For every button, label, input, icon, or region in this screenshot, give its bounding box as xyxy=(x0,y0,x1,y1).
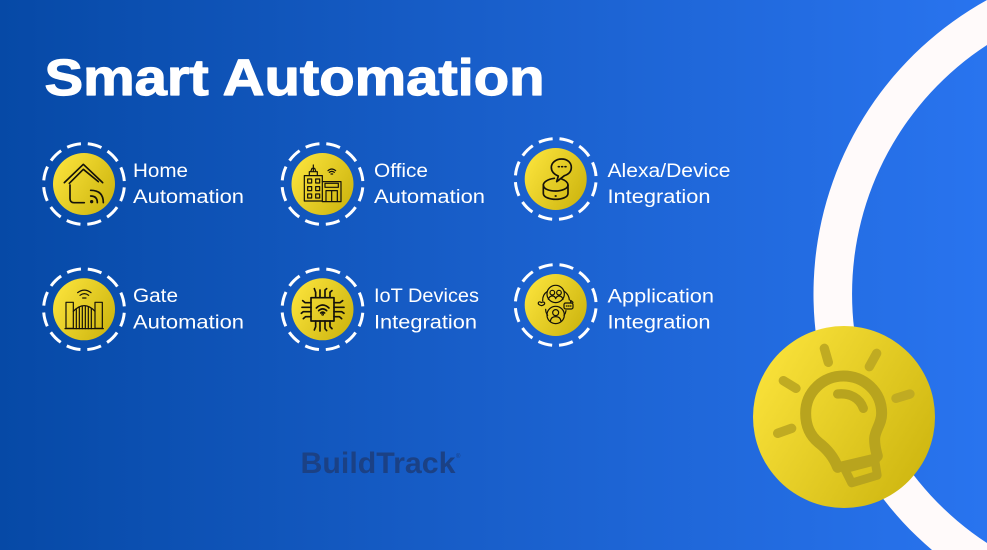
logo: BuildTrack: BuildTrack xyxy=(300,447,456,480)
label: iot devices integration: IoT Devices xyxy=(374,286,479,307)
label: alexa device integration: Alexa/Device xyxy=(608,161,730,182)
title: Smart Automation xyxy=(44,49,544,106)
item: office automation xyxy=(282,144,485,224)
logo: BuildTrack: ® xyxy=(456,453,461,460)
icon: chip xyxy=(282,269,363,350)
label: home automation: Automation xyxy=(133,187,244,208)
item: alexa device integration xyxy=(515,139,730,219)
item: iot devices integration xyxy=(282,269,479,350)
label: office automation: Office xyxy=(374,161,428,182)
icon: gate xyxy=(44,269,124,350)
label: iot devices integration: Integration xyxy=(374,312,477,334)
icon: connected users xyxy=(515,265,596,345)
label: iot devices integration xyxy=(374,286,479,334)
label: office automation: Automation xyxy=(374,187,485,208)
item: gate automation xyxy=(44,269,244,350)
icon: light bulb xyxy=(753,326,935,508)
label: alexa device integration xyxy=(608,161,730,208)
label: application integration: Application xyxy=(608,286,714,308)
label: home automation xyxy=(133,161,244,208)
label: application integration: Integration xyxy=(608,312,710,334)
decorative ring xyxy=(813,0,987,550)
label: home automation: Home xyxy=(133,161,188,182)
label: gate automation: Gate xyxy=(133,286,178,307)
label: gate automation: Automation xyxy=(133,312,244,334)
item: application integration xyxy=(515,265,714,345)
icon: home xyxy=(44,144,124,224)
label: application integration xyxy=(608,286,714,334)
label: alexa device integration: Integration xyxy=(608,187,710,208)
item: home automation xyxy=(44,144,244,224)
icon: alexa speaker xyxy=(515,139,596,219)
label: office automation xyxy=(374,161,485,208)
label: gate automation xyxy=(133,286,244,334)
icon: office xyxy=(282,144,363,224)
